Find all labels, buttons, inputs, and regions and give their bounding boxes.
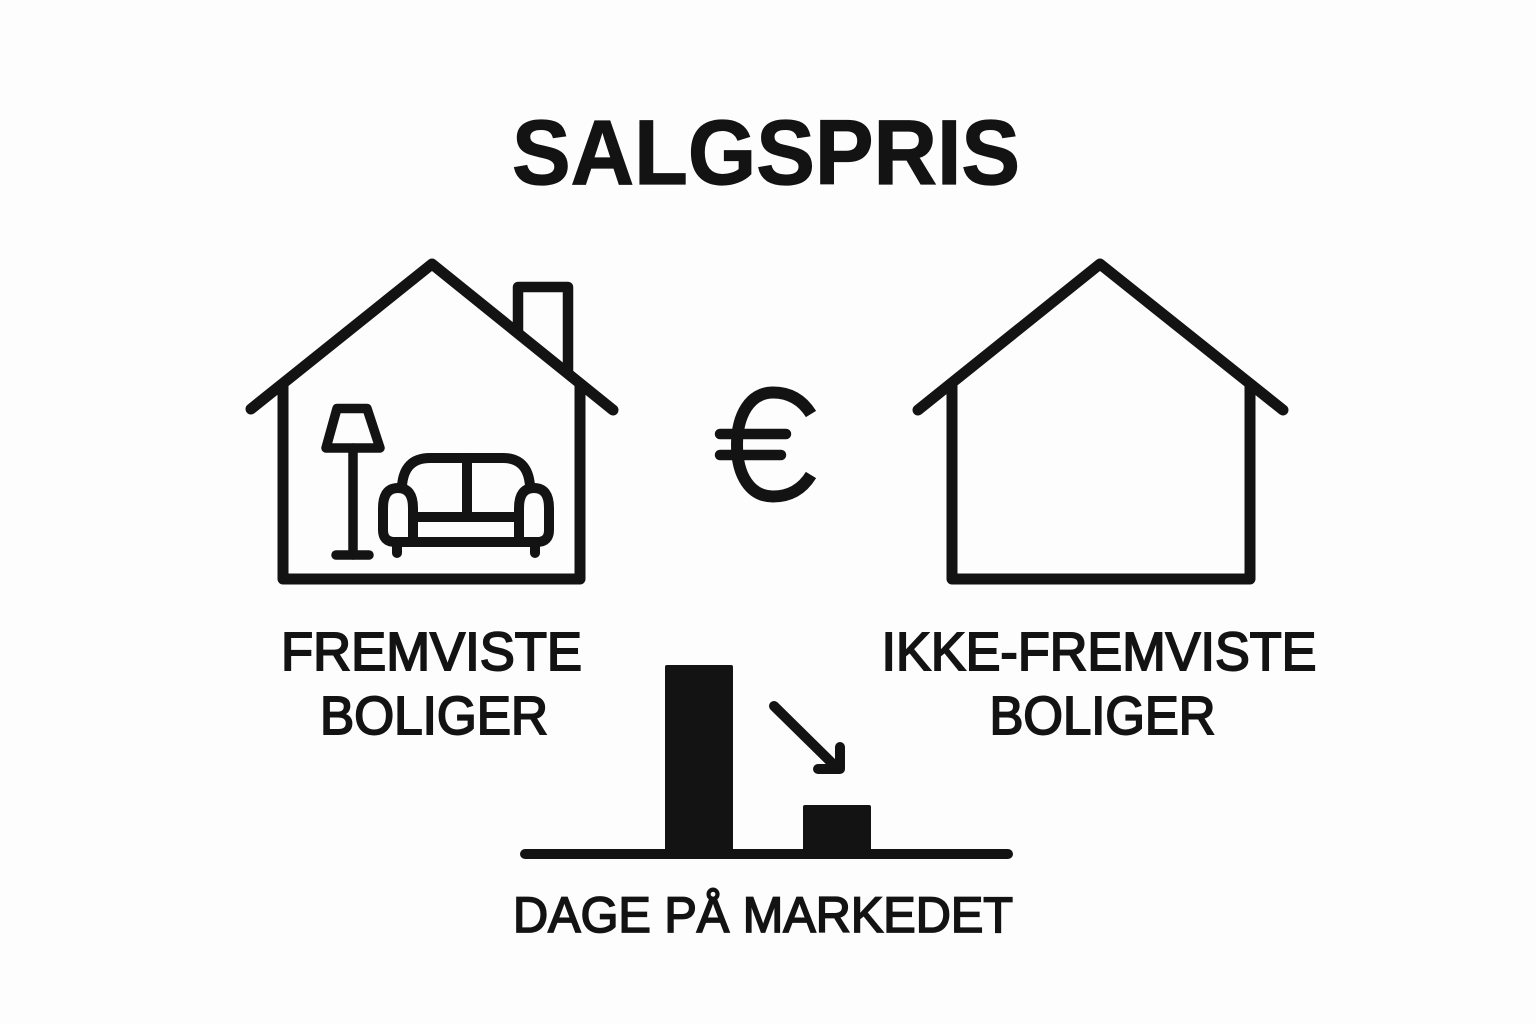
label: dage på markedet: DAGE PÅ MARKEDET [513, 887, 1013, 943]
baseline [520, 849, 1013, 859]
icon: floor lamp [326, 408, 380, 555]
title: SALGSPRIS [512, 102, 1020, 204]
icon: euro sign [720, 392, 811, 496]
house roof [251, 264, 613, 410]
label: fremviste boliger: FREMVISTE [281, 622, 582, 682]
tall bar [665, 665, 733, 855]
label: ikke-fremviste boliger line two: BOLIGER [990, 686, 1216, 746]
label: ikke-fremviste boliger: IKKE-FREMVISTE [882, 622, 1316, 682]
chimney [518, 287, 568, 373]
icon: empty house [918, 264, 1283, 579]
arrow pointing down [774, 706, 840, 769]
icon: sofa [383, 458, 549, 553]
house walls [283, 384, 580, 579]
icon: furnished house [251, 264, 613, 579]
short bar [803, 805, 871, 855]
bar chart [520, 665, 1013, 859]
label: fremviste boliger line two: BOLIGER [320, 686, 548, 746]
